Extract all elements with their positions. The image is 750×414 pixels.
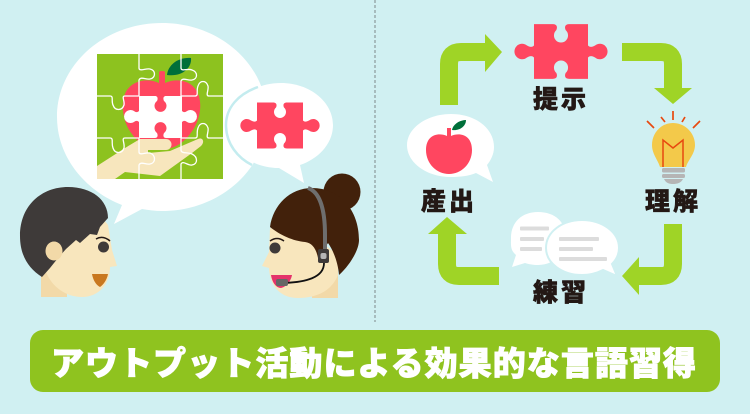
headset xyxy=(276,188,329,286)
male character xyxy=(20,187,117,297)
apple xyxy=(123,71,200,149)
icon: conversation bubbles xyxy=(511,212,619,276)
puzzle apple illustration xyxy=(97,54,223,179)
arrow: output to presentation xyxy=(449,34,502,105)
arrow: practice to output xyxy=(428,217,499,276)
missing puzzle piece xyxy=(124,96,197,138)
label: output: 産出 xyxy=(421,188,477,216)
label: presentation: 提示 xyxy=(533,86,589,114)
large speech bubble xyxy=(57,23,267,224)
hand xyxy=(97,139,203,179)
label: practice: 練習 xyxy=(533,279,589,307)
bubble outline ring xyxy=(226,87,258,165)
title: アウトプット活動による効果的な言語習得 xyxy=(51,345,696,382)
title banner xyxy=(30,330,720,392)
female character xyxy=(262,174,360,298)
label: understanding: 理解 xyxy=(645,188,701,216)
icon: light bulb xyxy=(647,111,700,184)
icon: puzzle piece xyxy=(514,24,608,79)
puzzle piece in small bubble xyxy=(240,102,320,148)
panel: learning cycle xyxy=(407,24,701,307)
icon: apple speech bubble xyxy=(407,114,494,182)
leaf xyxy=(167,58,191,75)
arrow: presentation to understanding xyxy=(622,52,692,104)
small speech bubble xyxy=(228,83,333,183)
panel: conversation scene xyxy=(20,23,360,298)
puzzle cut lines xyxy=(97,54,223,179)
arrow: understanding to practice xyxy=(622,224,673,295)
